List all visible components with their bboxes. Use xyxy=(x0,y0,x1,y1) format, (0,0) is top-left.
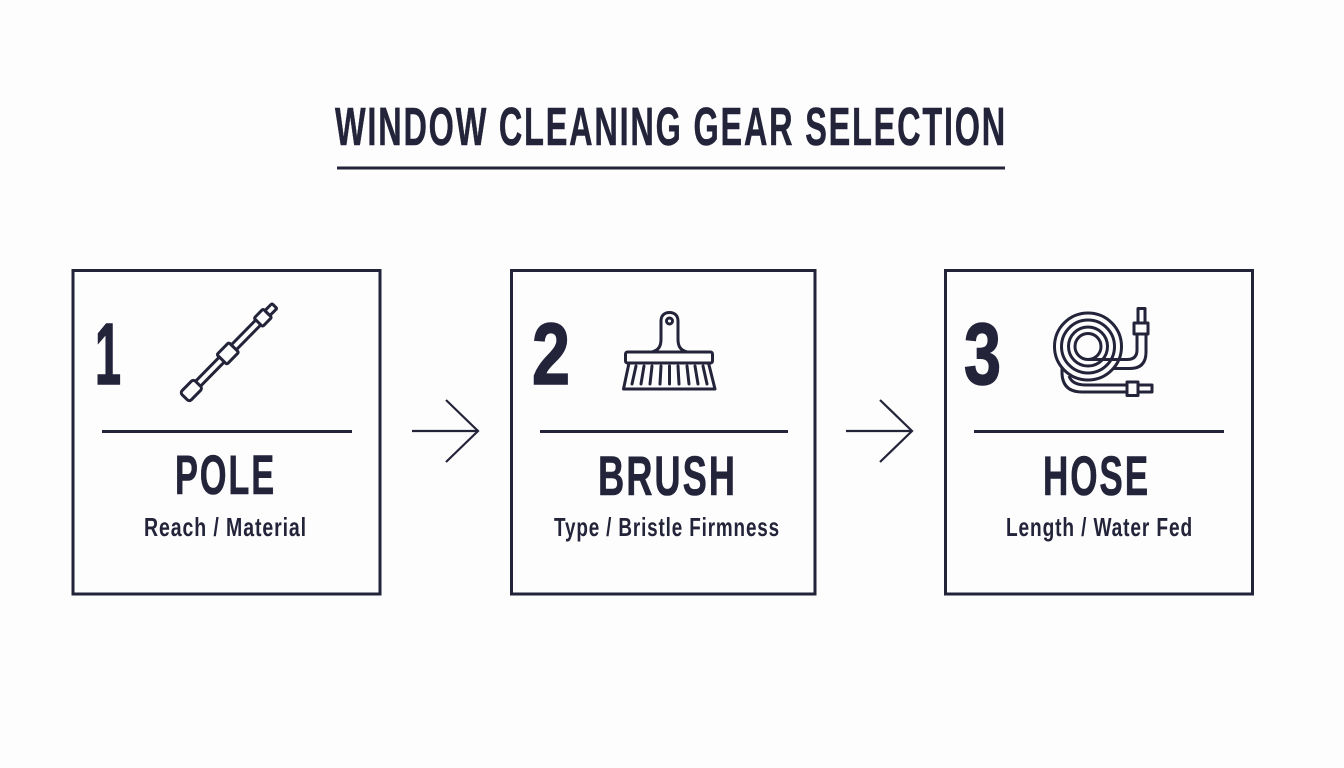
step number 1: 1 xyxy=(95,306,121,403)
arrow: pole to brush xyxy=(412,400,478,462)
subtext: pole: Reach / Material xyxy=(144,512,307,542)
title xyxy=(335,97,1007,170)
divider xyxy=(974,430,1224,433)
subtext: hose: Length / Water Fed xyxy=(1006,512,1193,542)
panel: hose xyxy=(946,270,1252,594)
icon: telescopic pole xyxy=(180,301,279,402)
icon: brush xyxy=(624,312,715,389)
heading: brush: BRUSH xyxy=(598,444,737,507)
step number 3: 3 xyxy=(964,306,1001,403)
arrow: brush to hose xyxy=(846,400,912,462)
heading: hose: HOSE xyxy=(1043,444,1150,507)
subtext: brush: Type / Bristle Firmness xyxy=(554,512,780,542)
panel: pole xyxy=(73,270,380,594)
divider xyxy=(540,430,788,433)
panel: brush xyxy=(512,270,815,594)
icon: coiled hose xyxy=(1054,308,1152,396)
divider xyxy=(102,430,352,433)
heading: pole: POLE xyxy=(175,443,276,506)
step number 2: 2 xyxy=(532,306,570,403)
